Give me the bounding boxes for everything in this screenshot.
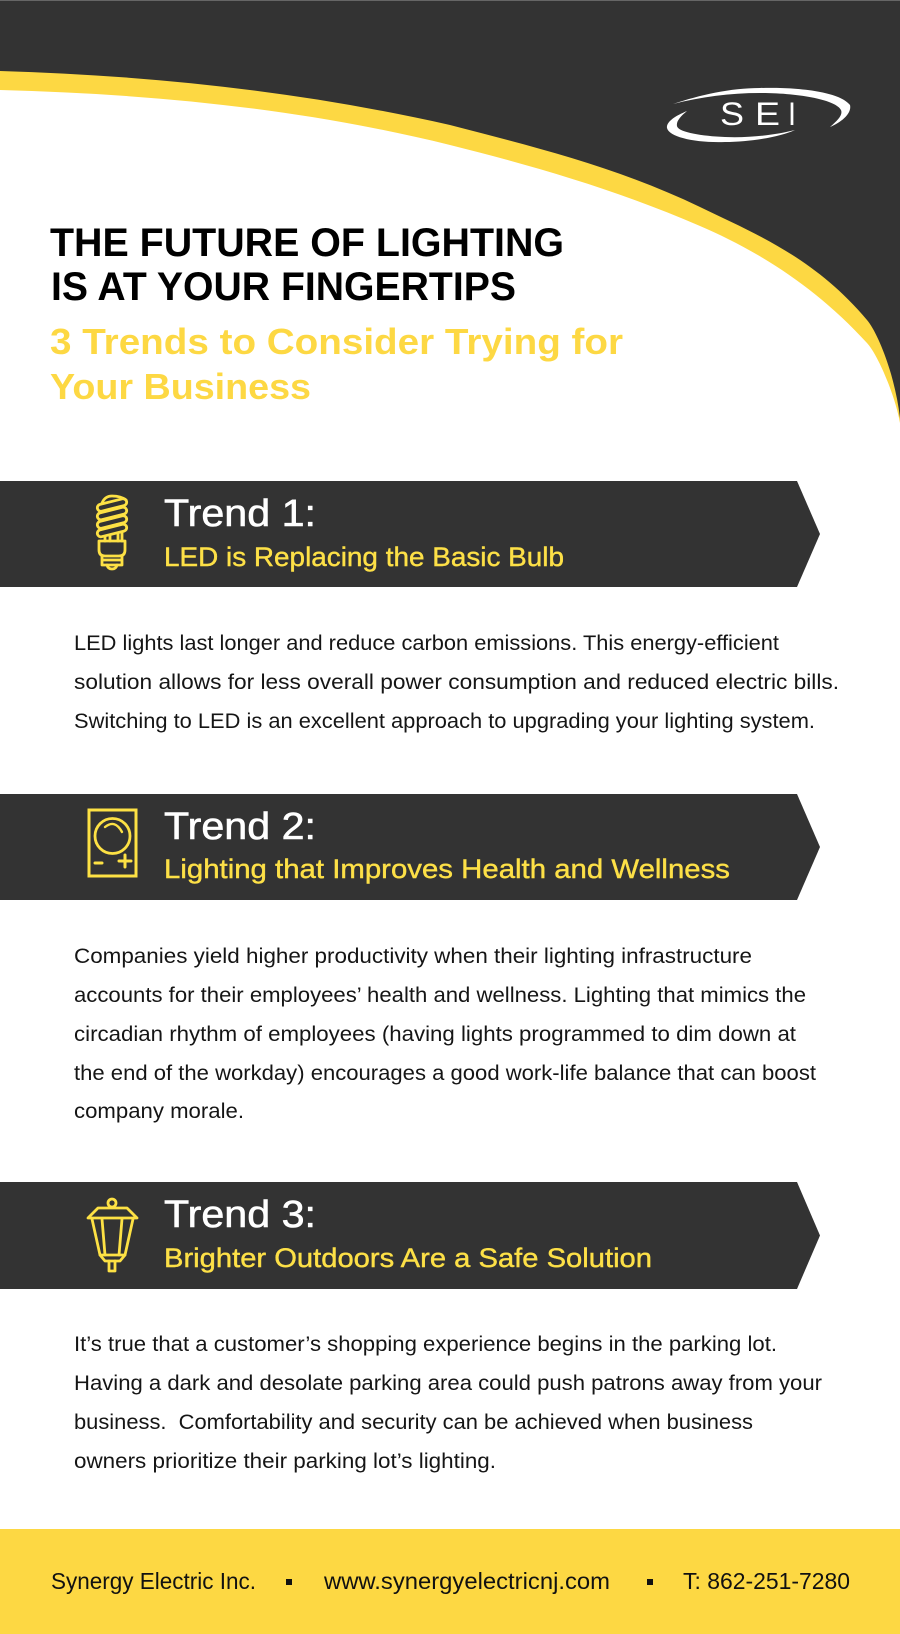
- text block: trend 3 body: Having a dark and desolate parking area could push patrons away from your: [74, 1371, 822, 1395]
- icon: outdoor lantern: [88, 1199, 137, 1271]
- text block: trend 3 body: [74, 1332, 822, 1473]
- text block: trend 1 body: Switching to LED is an excellent approach to upgrading your lighting system.: [74, 709, 815, 733]
- panel: trend 2 banner: [0, 794, 820, 900]
- text block: trend 2 body: [74, 944, 816, 1123]
- logo: SEI: S: [720, 96, 744, 132]
- title: IS AT YOUR FINGERTIPS: [51, 265, 516, 309]
- trend 1 subheading: LED is Replacing the Basic Bulb: [164, 542, 564, 572]
- title: [50, 221, 564, 309]
- title: THE FUTURE OF LIGHTING: [50, 221, 564, 265]
- text block: trend 3 body: owners prioritize their parking lot’s lighting.: [74, 1449, 496, 1473]
- footer: separator: [286, 1579, 292, 1585]
- text block: trend 2 body: circadian rhythm of employees (having lights programmed to dim down at: [74, 1022, 796, 1046]
- trend 2 subheading: Lighting that Improves Health and Wellness: [164, 854, 730, 884]
- footer: company name: Synergy Electric Inc.: [51, 1568, 256, 1594]
- text block: trend 2 body: company morale.: [74, 1099, 244, 1123]
- logo: SEI: E: [755, 96, 780, 132]
- footer: phone: T: 862-251-7280: [683, 1568, 850, 1594]
- subtitle: [50, 321, 623, 407]
- icon: dimmer switch: [89, 810, 136, 876]
- text block: trend 2 body: Companies yield higher productivity when their lighting infrastructure: [74, 944, 752, 968]
- trend 2 heading: Trend 2:: [164, 806, 316, 848]
- header curved banner: [0, 0, 900, 423]
- text block: trend 1 body: LED lights last longer and reduce carbon emissions. This energy-efficient: [74, 631, 779, 655]
- trend 1 heading: Trend 1:: [164, 493, 316, 535]
- text block: trend 3 body: business. Comfortability and security can be achieved when business: [74, 1410, 753, 1434]
- trend 3 heading: Trend 3:: [164, 1194, 316, 1236]
- icon: spiral LED bulb: [97, 496, 127, 569]
- logo: SEI: I: [788, 96, 796, 132]
- logo: SEI: [667, 88, 850, 142]
- text block: trend 1 body: solution allows for less overall power consumption and reduced electric bills.: [74, 670, 839, 694]
- subtitle: Your Business: [50, 366, 311, 407]
- panel: trend 3 banner: [0, 1182, 820, 1289]
- footer: separator: [647, 1579, 653, 1585]
- text block: trend 2 body: accounts for their employees’ health and wellness. Lighting that mimics the: [74, 983, 806, 1007]
- text block: trend 2 body: the end of the workday) encourages a good work-life balance that can boost: [74, 1061, 816, 1085]
- footer bar: [0, 1529, 900, 1634]
- panel: trend 1 banner: [0, 481, 820, 587]
- trend 3 subheading: Brighter Outdoors Are a Safe Solution: [164, 1243, 652, 1273]
- text block: trend 1 body: [74, 631, 839, 733]
- subtitle: 3 Trends to Consider Trying for: [50, 321, 623, 362]
- footer: website: www.synergyelectricnj.com: [323, 1568, 610, 1594]
- text block: trend 3 body: It’s true that a customer’s shopping experience begins in the parking lot.: [74, 1332, 777, 1356]
